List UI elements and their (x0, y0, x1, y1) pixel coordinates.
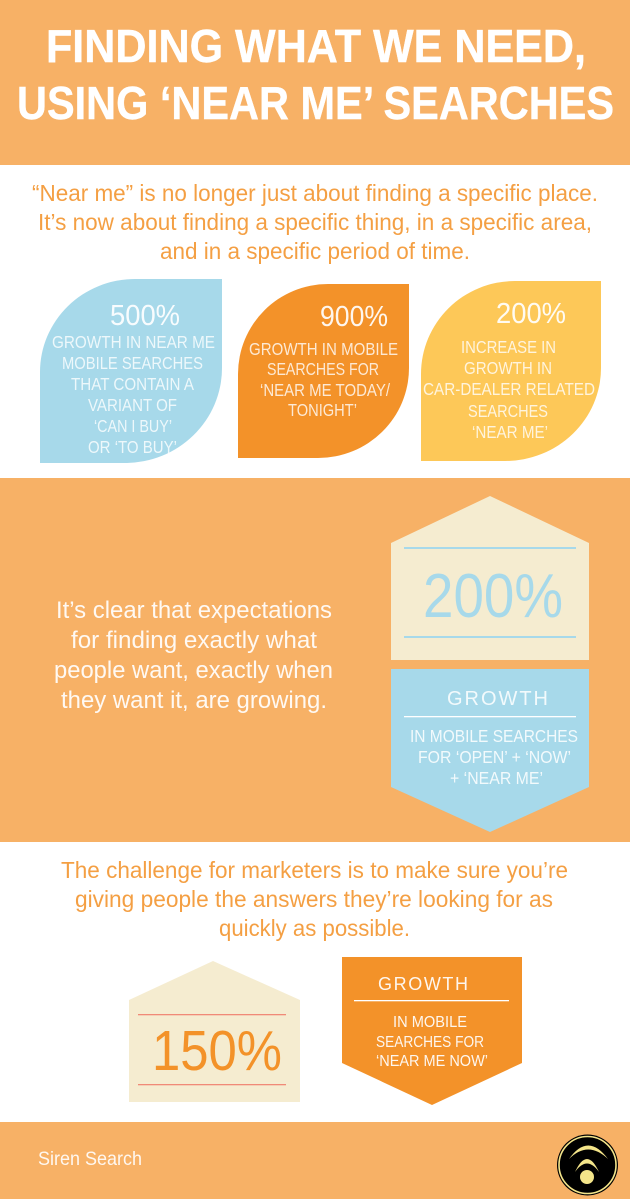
growth card: open now near me: FOR ‘OPEN’ + ‘NOW’ (418, 747, 571, 767)
brand name: Siren Search (38, 1148, 142, 1170)
growth card: near me now: ‘NEAR ME NOW’ (376, 1053, 488, 1070)
stat card: 200% (391, 496, 589, 660)
description: 500%: OR ‘TO BUY’ (88, 437, 177, 457)
stat: 500%: 500% (110, 300, 180, 332)
expectations text: for finding exactly what (71, 627, 317, 654)
description: 500%: ‘CAN I BUY’ (94, 416, 172, 436)
icon: siren search logo (557, 1134, 618, 1196)
panel: 200% leaf (421, 281, 601, 461)
stat: 200% increase: 200% (496, 298, 566, 330)
growth card: open now near me: IN MOBILE SEARCHES (410, 726, 578, 746)
description: 200% increase: GROWTH IN (464, 358, 552, 378)
header banner (0, 0, 630, 165)
expectations text: It’s clear that expectations (56, 597, 332, 624)
growth card: open now near me: + ‘NEAR ME’ (450, 768, 543, 788)
description: 900%: GROWTH IN MOBILE (249, 339, 398, 359)
description: 200% increase: CAR-DEALER RELATED (423, 379, 595, 399)
stat card: 150% (129, 961, 300, 1102)
panel: 900% leaf (238, 284, 409, 458)
expectations text: they want it, are growing. (61, 687, 327, 714)
challenge text: giving people the answers they’re looking for as (75, 886, 553, 912)
description: 200% increase: INCREASE IN (461, 337, 556, 357)
title (17, 20, 614, 129)
description: 500%: GROWTH IN NEAR ME (52, 332, 215, 352)
description: 900%: TONIGHT’ (288, 400, 357, 420)
intro text: “Near me” is no longer just about finding a specific place. (32, 180, 598, 206)
challenge text (61, 857, 568, 941)
stat card: 200%: 200% (423, 562, 563, 631)
growth card: near me now: IN MOBILE (393, 1014, 467, 1031)
challenge text: quickly as possible. (219, 915, 410, 941)
growth card: open now near me: GROWTH (447, 688, 548, 710)
challenge text: The challenge for marketers is to make sure you’re (61, 857, 568, 883)
stat card: 150%: 150% (152, 1019, 282, 1083)
description: 200% increase: ‘NEAR ME’ (472, 422, 548, 442)
expectations text: people want, exactly when (54, 657, 333, 684)
panel: expectations band (0, 478, 630, 842)
intro text: and in a specific period of time. (160, 238, 470, 264)
intro text: It’s now about finding a specific thing, in a specific area, (38, 209, 592, 235)
description: 500%: THAT CONTAIN A (71, 374, 194, 394)
title: FINDING WHAT WE NEED, (46, 20, 586, 72)
stat: 900%: 900% (320, 301, 388, 333)
growth card: open now near me (391, 669, 589, 832)
intro text (32, 180, 598, 264)
description: 500% (52, 332, 215, 457)
description: 500%: MOBILE SEARCHES (62, 353, 203, 373)
description: 200% increase (423, 337, 595, 442)
growth card: near me now: GROWTH (378, 974, 468, 994)
footer band (0, 1122, 630, 1199)
expectations text (54, 597, 333, 714)
description: 500%: VARIANT OF (88, 395, 177, 415)
panel: 500% leaf (40, 279, 222, 463)
growth card: near me now (342, 957, 522, 1105)
description: 200% increase: SEARCHES (468, 401, 548, 421)
description: 900%: SEARCHES FOR (267, 359, 379, 379)
description: 900%: ‘NEAR ME TODAY/ (260, 380, 390, 400)
description: 900% (249, 339, 398, 420)
growth card: near me now: SEARCHES FOR (376, 1034, 484, 1051)
